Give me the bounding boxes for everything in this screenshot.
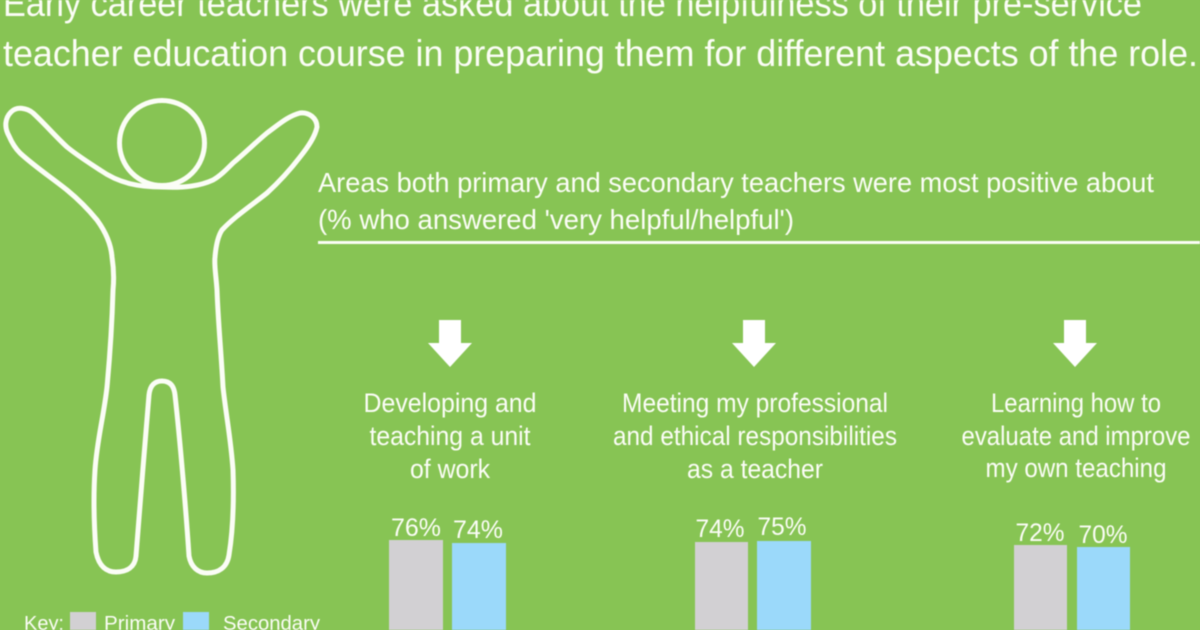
bar chart: 76% xyxy=(391,514,441,542)
bar chart: 70% xyxy=(1078,521,1128,549)
column: learning how to evaluate and improve xyxy=(962,320,1190,630)
column label: my own teaching xyxy=(986,453,1166,483)
column label: and ethical responsibilities xyxy=(613,421,897,451)
icon: down arrow xyxy=(428,320,472,367)
icon: person with raised arms xyxy=(6,100,317,573)
column label: of work xyxy=(410,454,490,484)
legend xyxy=(24,612,320,630)
title xyxy=(3,0,1198,74)
bar chart: 74% xyxy=(453,516,503,544)
icon: down arrow xyxy=(732,320,776,367)
bar chart xyxy=(695,513,811,630)
column label: as a teacher xyxy=(687,454,823,484)
column label xyxy=(613,388,897,484)
column label: Learning how to xyxy=(991,388,1161,418)
column label: Developing and xyxy=(364,388,536,418)
column label xyxy=(364,388,536,484)
subheading: Areas both primary and secondary teachers were most positive about xyxy=(318,167,1154,198)
column label: teaching a unit xyxy=(370,421,531,451)
column label xyxy=(962,388,1190,483)
subheading: (% who answered 'very helpful/helpful') xyxy=(318,204,794,235)
bar chart: 74% xyxy=(696,515,744,543)
bar chart: 72% xyxy=(1016,519,1064,547)
title: teacher education course in preparing them for different aspects of the role. xyxy=(3,33,1198,74)
column: meeting my professional and ethical responsibilities xyxy=(613,320,897,630)
column label: Meeting my professional xyxy=(622,388,888,418)
subheading xyxy=(318,167,1154,235)
column: developing and teaching a unit of work xyxy=(364,320,536,630)
bar chart xyxy=(1014,519,1130,630)
bar chart: 75% xyxy=(758,513,806,541)
bar chart xyxy=(389,514,506,630)
icon: down arrow xyxy=(1053,320,1097,367)
